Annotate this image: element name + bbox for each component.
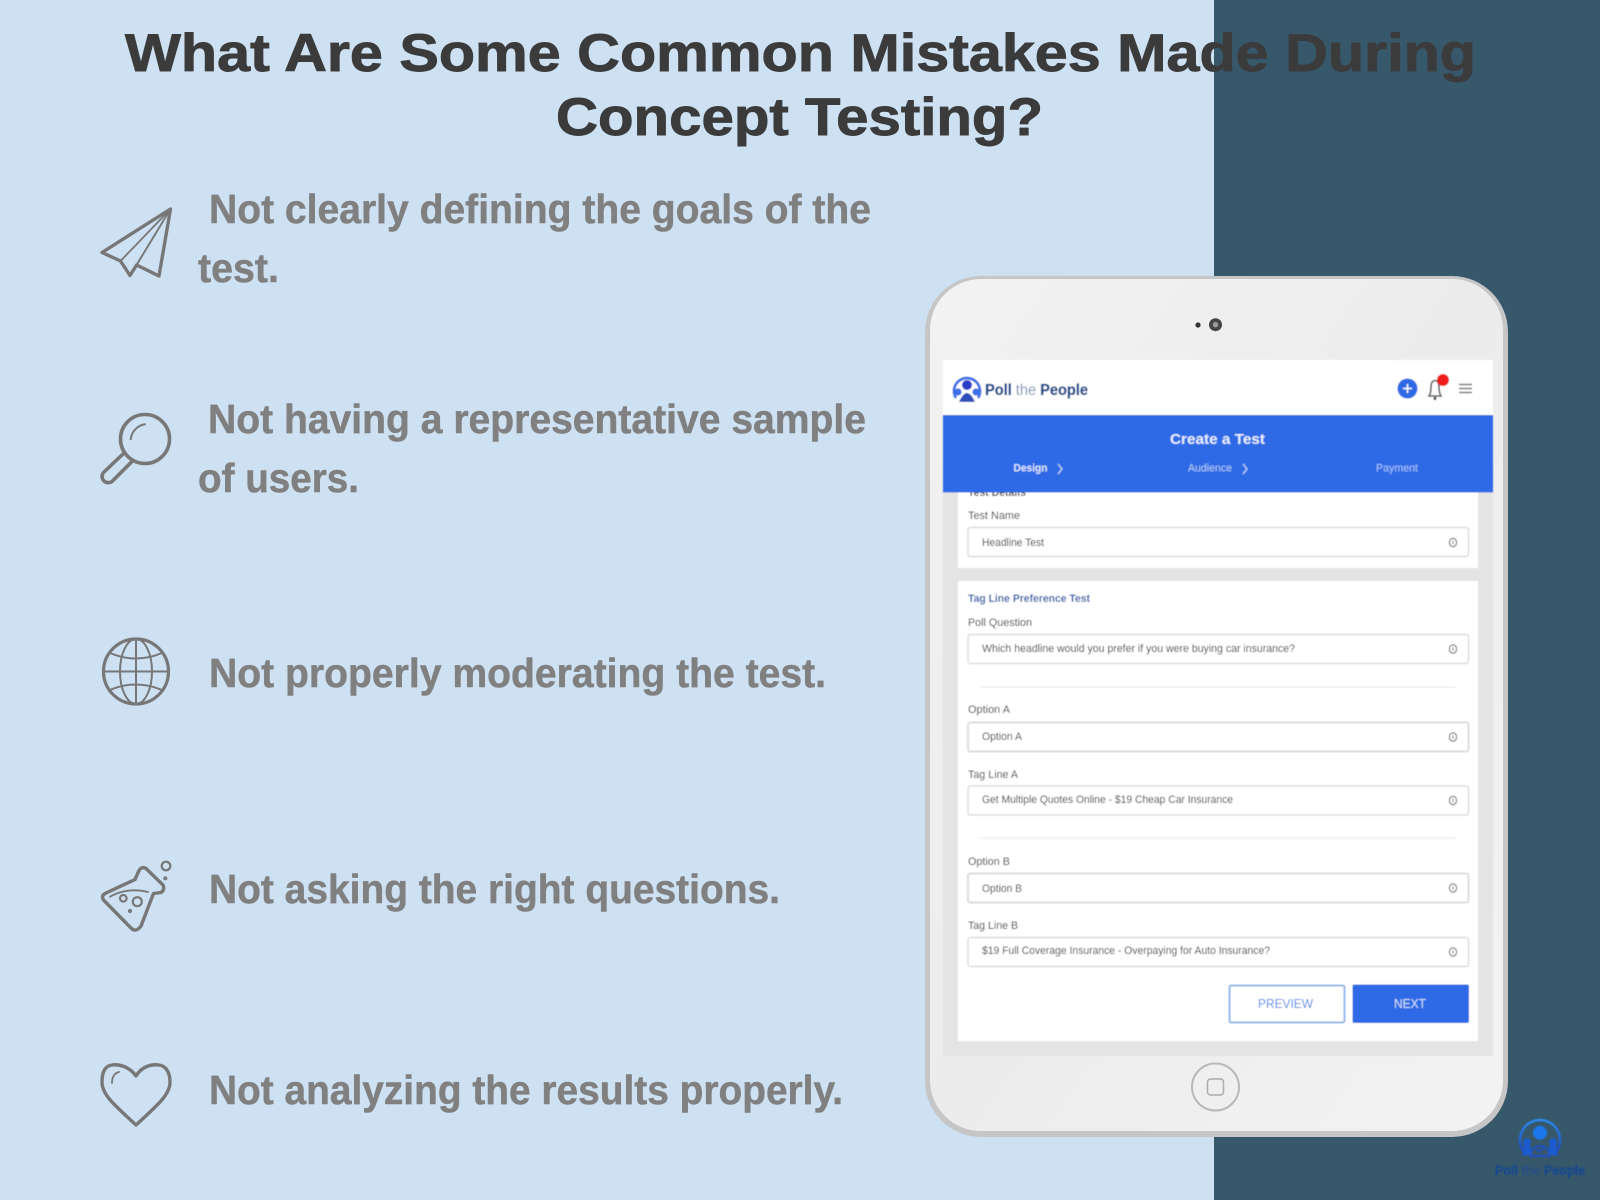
notification bell [1429, 374, 1449, 400]
button: next [1352, 984, 1469, 1023]
mistake 2 text: of users. [198, 455, 359, 501]
icon: magnifying glass [102, 414, 170, 483]
blue page banner: Design [1014, 462, 1048, 474]
field: tag line a [968, 769, 1468, 815]
tablet camera [1195, 318, 1222, 331]
field: poll question: Which headline would you prefer if you were buying car insurance? [982, 643, 1295, 655]
button: next: NEXT [1394, 996, 1426, 1011]
title: What Are Some Common Mistakes Made During [125, 24, 1476, 83]
blue page banner [943, 415, 1493, 492]
menu icon [1459, 384, 1472, 392]
title [125, 24, 1476, 147]
icon: globe [104, 639, 168, 704]
tablet home button [1192, 1064, 1239, 1110]
mistake 2 text [198, 396, 866, 501]
mistake 5 text: Not analyzing the results properly. [209, 1067, 843, 1113]
mistake 1 text: test. [198, 245, 279, 291]
card: test details: Headline Test [982, 537, 1044, 549]
section heading: Tag Line Preference Test [968, 593, 1090, 605]
brand logo: Poll the People: Poll the People [1495, 1163, 1585, 1178]
title: Concept Testing? [556, 88, 1043, 147]
add button [1398, 378, 1418, 398]
mistake 4 text: Not asking the right questions. [209, 866, 780, 912]
screen background [943, 360, 1493, 1056]
background: light blue panel [0, 0, 1214, 1200]
card: test details [958, 487, 1478, 568]
field: option a: Option A [982, 731, 1023, 743]
field: poll question [968, 617, 1468, 664]
icon: flask [103, 862, 170, 930]
field: option b: Option B [968, 856, 1010, 868]
field: option b [968, 856, 1468, 902]
button: preview [1230, 986, 1344, 1022]
card: test details: Test Details [968, 487, 1026, 499]
mistake 2 text: Not having a representative sample [208, 396, 866, 442]
icon: paper plane [102, 209, 170, 276]
button: preview: PREVIEW [1258, 996, 1314, 1011]
app logo icon [954, 378, 980, 402]
blue page banner: Payment [1376, 462, 1418, 474]
background: dark teal panel [1214, 0, 1600, 1200]
brand logo: Poll the People [1495, 1120, 1585, 1178]
field: tag line b: $19 Full Coverage Insurance - Overpaying for Auto Insurance? [982, 945, 1270, 957]
field: tag line a: Tag Line A [968, 769, 1019, 781]
mistake 1 text: Not clearly defining the goals of the [209, 186, 871, 232]
blue page banner: Create a Test [1170, 432, 1265, 448]
field: tag line a: Get Multiple Quotes Online - $19 Cheap Car Insurance [982, 794, 1233, 806]
app logo wordmark: Poll the People [985, 382, 1088, 399]
mistake 1 text [198, 186, 871, 291]
tablet mockup [925, 276, 1508, 1137]
field: poll question: Poll Question [968, 617, 1032, 629]
icon: heart [102, 1065, 170, 1125]
card: tag line preference test [958, 581, 1478, 1041]
blue page banner: Audience [1188, 462, 1232, 474]
screen: test creation form [943, 360, 1493, 1056]
field: tag line b: Tag Line B [968, 920, 1018, 932]
app header bar [943, 360, 1493, 415]
field: option a [968, 704, 1468, 752]
field: tag line b [968, 920, 1468, 966]
field: option a: Option A [968, 704, 1011, 716]
field: option b: Option B [982, 883, 1022, 895]
tablet body [925, 276, 1508, 1137]
mistake 3 text: Not properly moderating the test. [209, 650, 826, 696]
card: test details: Test Name [968, 510, 1020, 522]
